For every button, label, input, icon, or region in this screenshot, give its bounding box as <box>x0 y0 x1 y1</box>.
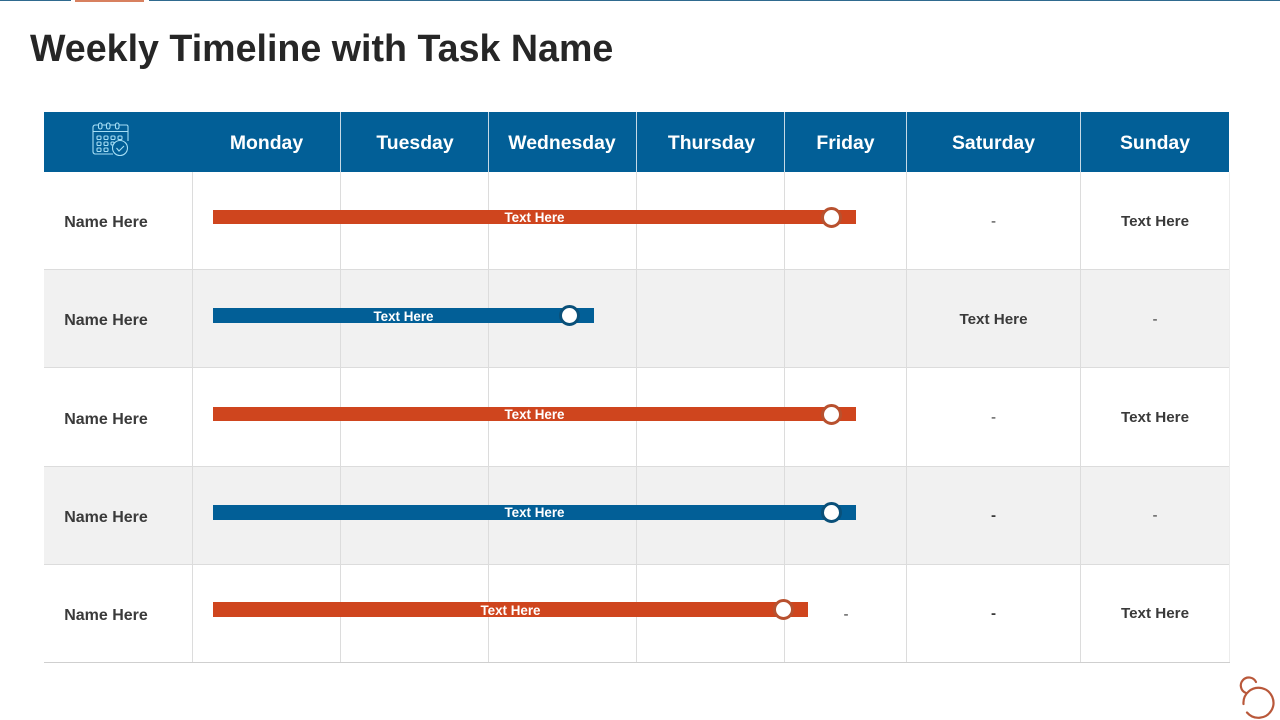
icon: corner logo <box>1240 676 1275 719</box>
row 5 Friday: - <box>843 606 849 623</box>
row label 3: Name Here <box>64 411 148 428</box>
bar label: Text Here <box>504 407 565 422</box>
row 3 Saturday: - <box>991 409 996 426</box>
timeline bar: row 5 <box>213 602 808 617</box>
heading: Wednesday: Wednesday <box>508 132 616 154</box>
row 1 Saturday: - <box>991 213 996 230</box>
row 4 Saturday: - <box>991 507 996 524</box>
milestone marker <box>558 305 580 326</box>
row 5 Sunday: Text Here <box>1121 605 1189 622</box>
row 1 Sunday: Text Here <box>1121 213 1189 230</box>
heading: Thursday: Thursday <box>668 132 755 154</box>
icon: calendar with check <box>92 122 129 156</box>
timeline bar: row 1 <box>213 210 856 224</box>
row background: row 4 <box>44 467 1230 565</box>
timeline bar: row 3 <box>213 407 856 421</box>
row 2 Saturday: Text Here <box>959 311 1028 328</box>
row 2 Sunday: - <box>1152 311 1158 328</box>
bar label: Text Here <box>480 603 541 618</box>
row 3 Sunday: Text Here <box>1121 409 1189 426</box>
table header band <box>44 112 1229 172</box>
timeline bar: row 2 <box>213 308 594 323</box>
bar label: Text Here <box>504 505 565 520</box>
row 5 Saturday: - <box>991 605 996 622</box>
row label 4: Name Here <box>64 509 148 526</box>
top accent line <box>0 0 1280 2</box>
bar label: Text Here <box>504 210 565 225</box>
milestone marker <box>772 599 794 620</box>
milestone marker <box>821 404 842 424</box>
row label 2: Name Here <box>64 312 148 329</box>
heading: Friday: Friday <box>816 132 875 154</box>
milestone marker <box>821 502 842 523</box>
row label 1: Name Here <box>64 214 148 231</box>
milestone marker <box>821 206 842 228</box>
title: Weekly Timeline with Task Name <box>30 27 613 69</box>
heading: Saturday: Saturday <box>952 132 1035 154</box>
bar label: Text Here <box>373 309 434 324</box>
row background: row 2 <box>44 270 1230 368</box>
row 4 Sunday: - <box>1152 507 1158 524</box>
heading: Tuesday: Tuesday <box>376 132 454 154</box>
heading: Sunday: Sunday <box>1120 132 1190 154</box>
panel: timeline table <box>44 112 1230 663</box>
timeline bar: row 4 <box>213 505 856 520</box>
heading: Monday: Monday <box>230 132 303 154</box>
row label 5: Name Here <box>64 607 148 624</box>
